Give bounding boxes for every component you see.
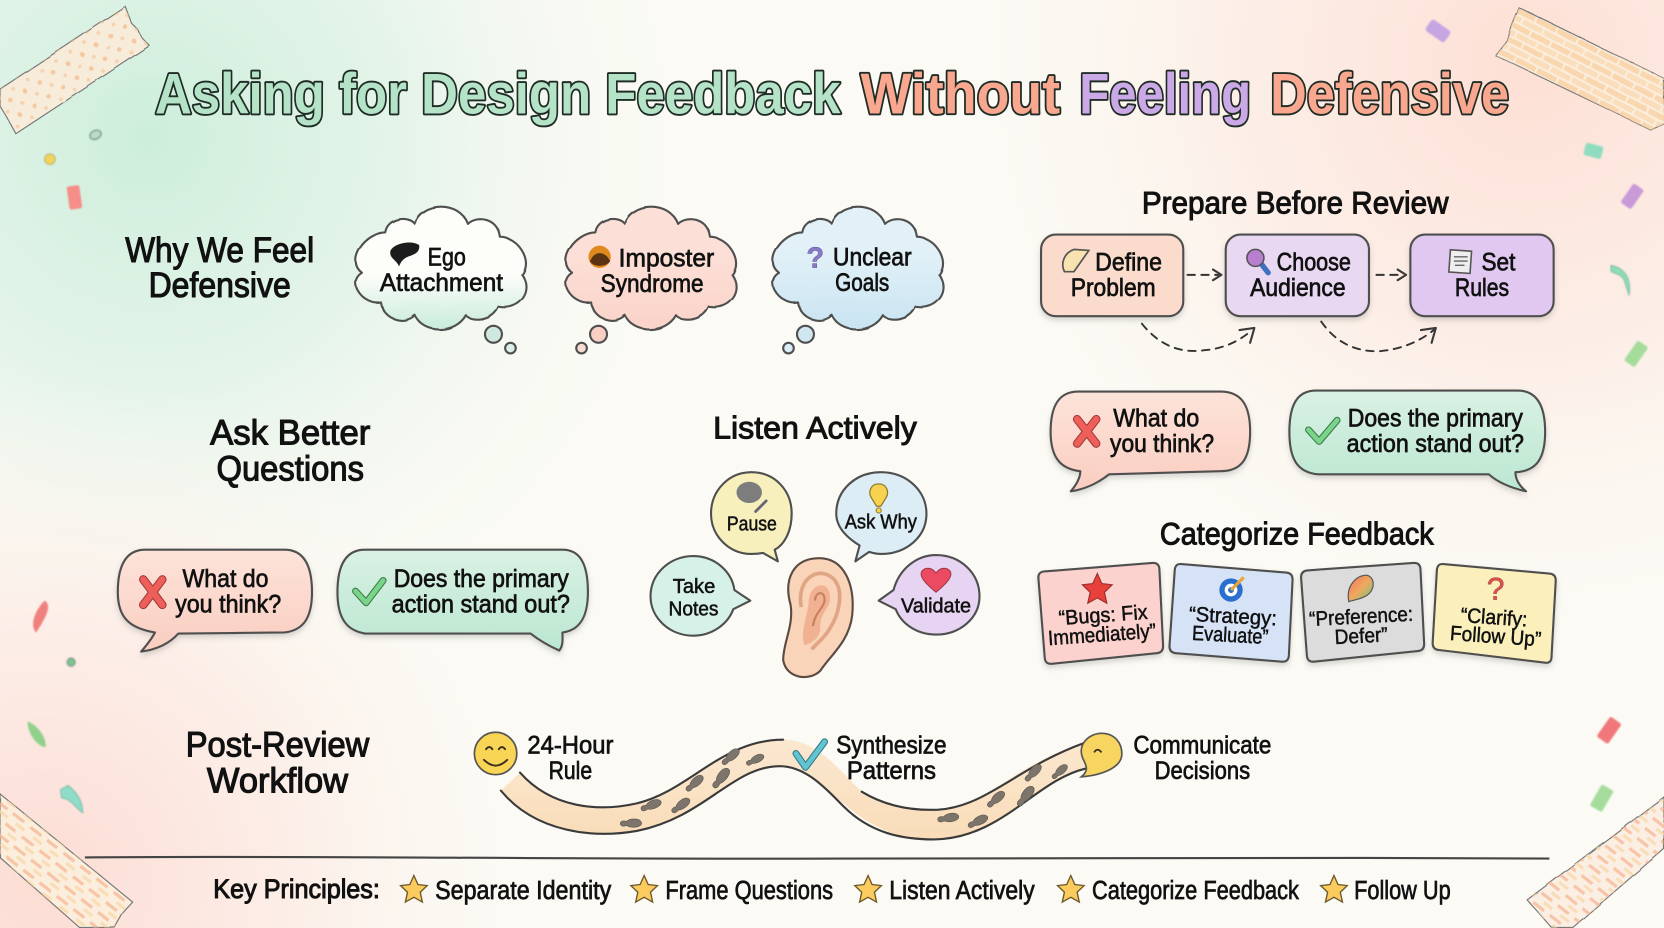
- step: synthesize patterns: [796, 731, 947, 785]
- step: define problem: Problem: [1071, 274, 1156, 302]
- principle: categorize feedback: Categorize Feedback: [1092, 877, 1299, 905]
- footprints: [620, 747, 1069, 829]
- title: Without: [861, 63, 1060, 127]
- heading: ask better questions: Ask Better: [210, 413, 371, 453]
- principle: follow up: [1321, 876, 1451, 905]
- icon: pencil note: [1063, 249, 1089, 272]
- bubble: validate: [879, 555, 980, 635]
- heading: post-review workflow: Post-Review: [186, 725, 370, 765]
- panel: categorize feedback: [1038, 515, 1556, 664]
- step: define problem: [1041, 235, 1183, 316]
- key principles strip: [213, 874, 1451, 905]
- icon: yellow speech bubble: [1081, 733, 1122, 777]
- panel: ask better questions: [118, 413, 588, 652]
- speech bubble: bad question (right): What do: [1113, 405, 1199, 433]
- bubble: take notes: Notes: [669, 599, 718, 621]
- washi tape: top right: [1495, 7, 1664, 129]
- card: strategy: “Strategy:: [1188, 603, 1277, 630]
- icon: lightbulb: [870, 484, 888, 513]
- speech bubble: bad question (right): [1051, 392, 1250, 491]
- thought cloud: unclear goals: Unclear: [833, 243, 912, 271]
- step: choose audience: Audience: [1250, 274, 1346, 302]
- heading: categorize feedback: Categorize Feedback: [1160, 515, 1434, 551]
- card: clarify: “Clarify:: [1460, 604, 1528, 632]
- thought cloud: imposter syndrome: Syndrome: [601, 270, 704, 298]
- card: clarify: [1433, 564, 1556, 663]
- step: set rules: Rules: [1455, 274, 1509, 302]
- bubble: ask why: [836, 472, 926, 561]
- thought cloud: ego attachment: Ego: [428, 243, 466, 271]
- speech bubble: bad question: [118, 550, 312, 652]
- key principles strip: Key Principles:: [213, 874, 380, 904]
- icon: red star: [1082, 574, 1112, 603]
- principle: follow up: Follow Up: [1354, 877, 1451, 905]
- heading: listen actively: Listen Actively: [713, 409, 917, 445]
- step: set rules: [1410, 235, 1554, 316]
- principle: listen actively: Listen Actively: [889, 877, 1035, 905]
- bubble: take notes: [651, 556, 750, 636]
- icon: green check: [1308, 420, 1337, 441]
- thought cloud: unclear goals: Goals: [835, 269, 889, 297]
- bubble: validate: Validate: [901, 595, 971, 617]
- speech bubble: bad question: What do: [183, 565, 268, 593]
- icon: notepad: [1449, 250, 1472, 273]
- speech bubble: bad question: you think?: [175, 590, 281, 618]
- thought cloud: imposter syndrome: Imposter: [619, 244, 714, 272]
- card: strategy: [1169, 564, 1293, 662]
- arrow: curved choose to set: [1321, 322, 1436, 351]
- arrow: dashed choose to set: [1376, 270, 1406, 280]
- washi tape: top left: [0, 6, 150, 134]
- thought cloud: imposter syndrome: [566, 207, 737, 353]
- title: [155, 63, 1509, 127]
- icon: red cross: [143, 579, 162, 605]
- step: set rules: Set: [1481, 249, 1515, 277]
- speech bubble: good question: [337, 550, 588, 651]
- speech bubble: good question (right): action stand out?: [1347, 430, 1524, 458]
- step: 24-hour rule: 24-Hour: [527, 731, 613, 759]
- washi tape: bottom right: [1527, 797, 1664, 928]
- panel: prepare before review: [1041, 184, 1554, 351]
- bubble: take notes: Take: [673, 576, 715, 598]
- speech bubble: good question: action stand out?: [392, 590, 570, 618]
- arrow: curved define to choose: [1142, 324, 1254, 351]
- icon: red question mark: ?: [1487, 571, 1504, 607]
- bubble: ask why: Ask Why: [845, 511, 918, 533]
- step: 24-hour rule: [474, 731, 613, 785]
- principle: frame questions: Frame Questions: [665, 877, 833, 905]
- card: bugs: “Bugs: Fix: [1058, 601, 1149, 630]
- thought cloud: ego attachment: [356, 207, 527, 353]
- heading: why we feel defensive: Defensive: [149, 265, 291, 305]
- card: strategy: Evaluate”: [1191, 622, 1269, 649]
- card: preference: “Preference:: [1309, 603, 1414, 631]
- card: preference: Defer”: [1334, 623, 1388, 649]
- step: communicate decisions: Communicate: [1133, 731, 1271, 759]
- speech bubble: good question: Does the primary: [394, 565, 569, 593]
- step: synthesize patterns: Synthesize: [836, 731, 947, 759]
- speech bubble: good question (right): Does the primary: [1348, 405, 1523, 433]
- heading: post-review workflow: [186, 725, 370, 801]
- step: choose audience: [1226, 235, 1369, 316]
- icon: question mark: ?: [807, 242, 824, 274]
- step: communicate decisions: Decisions: [1155, 757, 1250, 785]
- panel: post-review workflow: [186, 725, 1271, 839]
- icon: smiley: [474, 732, 517, 775]
- title: Feeling: [1079, 63, 1251, 127]
- icon: mask: [588, 246, 611, 268]
- heading: why we feel defensive: [125, 230, 314, 305]
- icon: brain: [390, 243, 419, 266]
- title: Defensive: [1270, 63, 1509, 127]
- step: communicate decisions: [1081, 731, 1271, 785]
- icon: ear: [783, 558, 853, 677]
- step: choose audience: Choose: [1277, 249, 1351, 277]
- bubble: pause: [711, 472, 792, 561]
- heading: why we feel defensive: Why We Feel: [125, 230, 314, 270]
- heading: prepare before review: Prepare Before Review: [1142, 184, 1450, 220]
- winding path with footprints: [501, 740, 1087, 839]
- panel: listen actively: [651, 409, 980, 677]
- principle: separate identity: Separate Identity: [435, 877, 612, 905]
- icon: magnifier: [1247, 249, 1268, 273]
- heading: ask better questions: Questions: [216, 449, 364, 489]
- icon: thought rock: [736, 482, 766, 512]
- icon: red cross: [1077, 419, 1096, 444]
- step: synthesize patterns: Patterns: [847, 757, 936, 785]
- icon: color leaf: [1348, 575, 1373, 602]
- icon: heart: [921, 568, 951, 592]
- speech bubble: good question (right): [1289, 391, 1545, 491]
- icon: teal check: [796, 742, 825, 767]
- step: 24-hour rule: Rule: [549, 757, 592, 785]
- heading: ask better questions: [210, 413, 371, 489]
- icon: green check: [356, 580, 383, 603]
- bubble: pause: Pause: [727, 514, 777, 536]
- card: bugs: Immediately”: [1047, 620, 1157, 650]
- arrow: dashed define to choose: [1188, 270, 1221, 280]
- card: bugs: [1038, 563, 1163, 664]
- thought cloud: ego attachment: Attachment: [380, 269, 503, 297]
- speech bubble: bad question (right): you think?: [1110, 430, 1214, 458]
- title: Asking for Design Feedback: [155, 63, 841, 127]
- thought cloud: unclear goals: [773, 207, 944, 353]
- washi tape: bottom left: [0, 794, 133, 928]
- panel: why we feel defensive: [125, 207, 944, 353]
- card: clarify: Follow Up”: [1449, 622, 1542, 651]
- icon: target: [1219, 577, 1244, 602]
- card: preference: [1301, 563, 1424, 662]
- heading: post-review workflow: Workflow: [207, 761, 348, 801]
- step: define problem: Define: [1095, 249, 1162, 277]
